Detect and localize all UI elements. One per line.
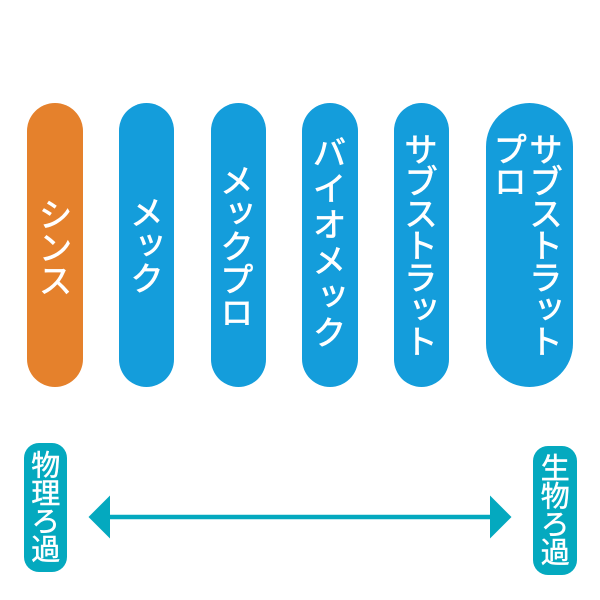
pill: メック: メック (124, 195, 162, 294)
pill: シンス (27, 102, 82, 386)
pill: シンス: シンス (33, 197, 71, 296)
pill: メック (118, 102, 174, 386)
pill: サブストラット: サブストラット (398, 132, 436, 356)
pill: サブストラットプロ (486, 102, 573, 386)
pill: バイオメック (302, 102, 358, 386)
pill: サブストラットプロ: プロ (488, 132, 526, 196)
tag: 生物ろ過 (533, 446, 576, 575)
pill: メックプロ: メックプロ (214, 162, 252, 328)
tag: 生物ろ過: 生物ろ過 (536, 452, 568, 564)
tag: 物理ろ過 (24, 443, 67, 572)
pill: メックプロ (210, 102, 266, 386)
arrow: double-headed (88, 496, 512, 538)
pill: サブストラットプロ: サブストラット (524, 132, 562, 356)
tag: 物理ろ過: 物理ろ過 (27, 450, 59, 562)
pill: バイオメック: バイオメック (307, 134, 345, 350)
pill: サブストラット (394, 102, 449, 386)
